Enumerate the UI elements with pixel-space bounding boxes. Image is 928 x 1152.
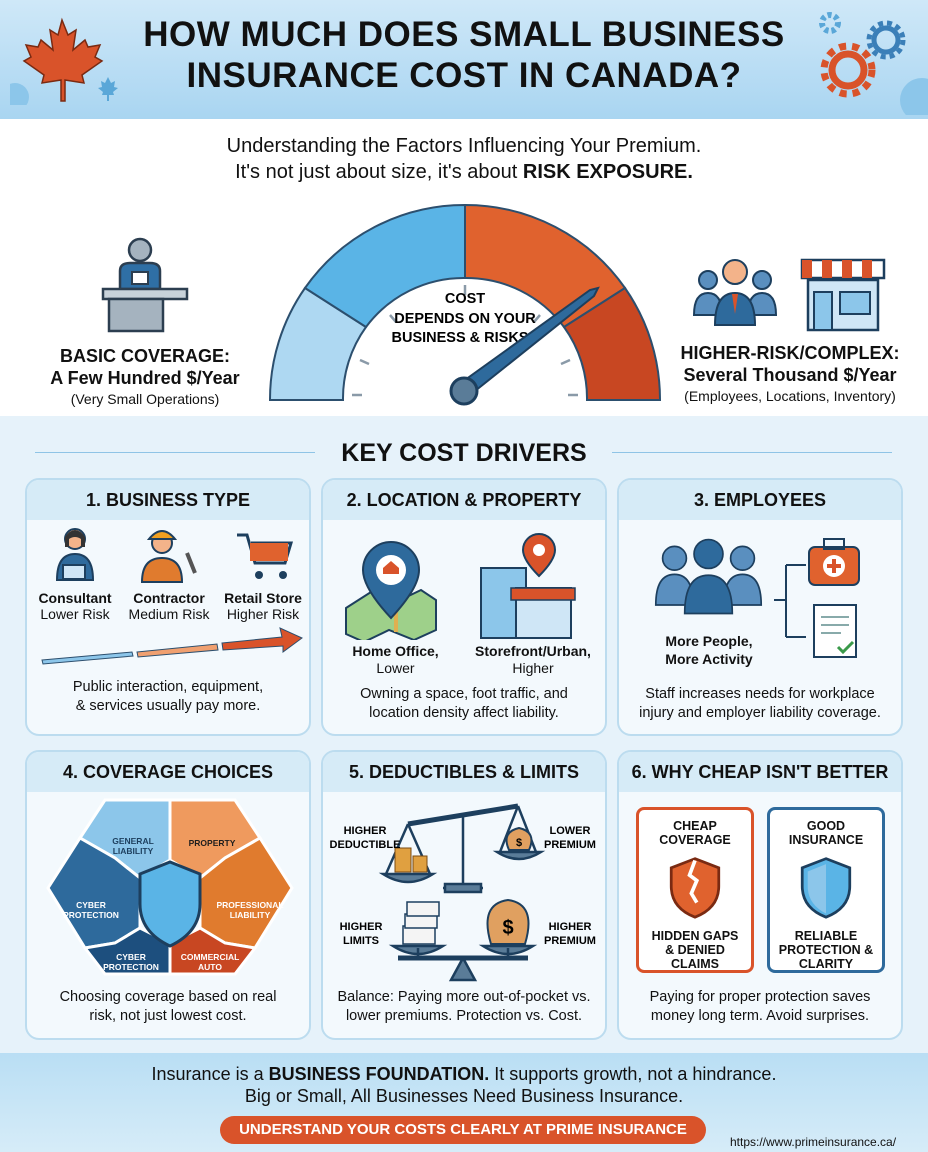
footer: [0, 1053, 928, 1152]
title: [143, 15, 785, 95]
footer message: [152, 1064, 776, 1106]
panel: coverage choices: [25, 750, 311, 1040]
chart: coverage hexagon: LIABILITY: [230, 910, 271, 920]
icon: scales: $: [502, 917, 514, 939]
panel: business type: [25, 478, 311, 736]
panel: location & property: Home Office,: [352, 643, 439, 659]
panel: business type: 1. BUSINESS TYPE: [86, 490, 250, 510]
right: higher risk: [680, 258, 900, 404]
panel: business type: Retail Store: [224, 590, 302, 606]
chart: coverage hexagon: PROPERTY: [189, 838, 236, 848]
card: cheap coverage: [636, 807, 754, 973]
icon: scales: $: [516, 837, 522, 849]
icon: team and storefront: [693, 258, 886, 332]
card: good insurance: GOOD: [807, 819, 845, 833]
chart: coverage hexagon: CYBER: [76, 900, 106, 910]
title: HOW MUCH DOES SMALL BUSINESS: [143, 15, 785, 54]
panel: location & property: Storefront/Urban,: [475, 643, 591, 659]
button: call to action: UNDERSTAND YOUR COSTS CLEARLY AT PRIME INSURANCE: [239, 1121, 687, 1138]
icon: scales: DEDUCTIBLE: [330, 839, 400, 851]
panel: business type: Contractor: [133, 590, 205, 606]
icon: desk worker: [102, 238, 188, 332]
gauge: DEPENDS ON YOUR: [394, 311, 536, 327]
panel: location & property: Higher: [512, 660, 554, 676]
gauge: BUSINESS & RISKS: [392, 330, 529, 346]
card: cheap coverage: CLAIMS: [671, 957, 719, 971]
panel: why cheap isn't better: money long term. Avoid surprises.: [651, 1008, 869, 1024]
panel: coverage choices: Choosing coverage based on real: [60, 989, 276, 1005]
icon: group and forms: [654, 538, 860, 658]
icon: scales: HIGHER: [549, 921, 591, 933]
card: good insurance: INSURANCE RELIABLE: [789, 833, 863, 943]
panel: employees: 3. EMPLOYEES: [694, 490, 826, 510]
panel: business type: Medium Risk: [129, 606, 209, 622]
panel: location & property: 2. LOCATION & PROPERTY: [347, 490, 581, 510]
card: good insurance: [767, 807, 885, 973]
subtitle: Understanding the Factors Influencing Your Premium.: [227, 135, 701, 157]
panel: business type: & services usually pay more.: [76, 698, 260, 714]
panel: why cheap isn't better: Paying for proper protection saves: [650, 989, 870, 1005]
panel: deductibles & limits: 5. DEDUCTIBLES & LIMITS: [349, 762, 579, 782]
chart: coverage hexagon: LIABILITY: [113, 846, 154, 856]
gauge: COST: [445, 291, 485, 307]
panel: deductibles & limits: [321, 750, 607, 1040]
left: basic coverage: A Few Hundred $/Year: [50, 368, 240, 388]
panel: employees: Staff increases needs for workplace: [645, 686, 875, 702]
url: https://www.primeinsurance.ca/: [730, 1135, 896, 1149]
panel: business type: Public interaction, equipment,: [73, 679, 263, 695]
right: higher risk: HIGHER-RISK/COMPLEX:: [680, 343, 900, 363]
subtitle: It's not just about size, it's about RISK EXPOSURE.: [235, 161, 693, 183]
title: INSURANCE COST IN CANADA?: [186, 56, 742, 95]
chart: coverage hexagon: PROTECTION: [103, 962, 159, 972]
card: good insurance: CLARITY: [799, 957, 853, 971]
button: call to action: [220, 1116, 706, 1144]
left: basic coverage: (Very Small Operations): [71, 391, 219, 407]
icon: scales: LOWER: [550, 825, 591, 837]
panel: why cheap isn't better: 6. WHY CHEAP ISN'T BETTER: [632, 762, 888, 782]
icon: scales: HIGHER: [344, 825, 386, 837]
panel: location & property: [321, 478, 607, 736]
card: cheap coverage: & DENIED: [665, 943, 725, 957]
panel: coverage choices: 4. COVERAGE CHOICES: [63, 762, 273, 782]
chart: coverage hexagon: CYBER: [116, 952, 146, 962]
subtitle: [0, 133, 928, 416]
section heading: key cost drivers: KEY COST DRIVERS: [341, 439, 587, 467]
icon: scales: HIGHER: [340, 921, 382, 933]
card: cheap coverage: CHEAP: [673, 819, 717, 833]
icon: scales: PREMIUM: [544, 839, 596, 851]
icon: scales: PREMIUM: [544, 935, 596, 947]
chart: coverage hexagon: AUTO: [198, 962, 222, 972]
chart: coverage hexagon: PROFESSIONAL: [216, 900, 284, 910]
panel: employees: More People,: [665, 633, 753, 649]
arrow: rising risk: [41, 627, 303, 664]
panel: why cheap isn't better: [617, 750, 903, 1040]
labels: [38, 590, 112, 622]
panel: business type: Higher Risk: [227, 606, 299, 622]
card: cheap coverage: COVERAGE HIDDEN GAPS: [652, 833, 738, 943]
header banner: [0, 0, 928, 119]
panel: location & property: location density affect liability.: [369, 705, 559, 721]
icon: map pin and buildings: [345, 533, 576, 640]
labels: Consultant: [38, 590, 112, 606]
left: basic coverage: BASIC COVERAGE:: [60, 346, 230, 366]
right: higher risk: Several Thousand $/Year: [683, 365, 897, 385]
chart: coverage hexagon: [46, 798, 294, 976]
left: basic coverage: [50, 238, 240, 407]
card: good insurance: PROTECTION &: [779, 943, 873, 957]
right: higher risk: (Employees, Locations, Inventory): [684, 388, 896, 404]
panel: coverage choices: risk, not just lowest cost.: [89, 1008, 247, 1024]
gauge: [269, 204, 661, 406]
icons: consultant contractor retail: [56, 528, 293, 583]
panel: location & property: Owning a space, foot traffic, and: [360, 686, 568, 702]
chart: coverage hexagon: GENERAL: [112, 836, 154, 846]
icon: gears: [819, 12, 928, 115]
footer message: Insurance is a BUSINESS FOUNDATION. It supports growth, not a hindrance.: [152, 1064, 776, 1084]
panel: deductibles & limits: lower premiums. Protection vs. Cost.: [346, 1008, 582, 1024]
chart: coverage hexagon: COMMERCIAL: [181, 952, 239, 962]
panel: deductibles & limits: Balance: Paying more out-of-pocket vs.: [337, 989, 591, 1005]
footer message: Big or Small, All Businesses Need Business Insurance.: [245, 1086, 683, 1106]
panel: employees: injury and employer liability coverage.: [639, 705, 881, 721]
labels: Lower Risk: [40, 606, 110, 622]
panel: location & property: Lower: [376, 660, 415, 676]
icon: maple leaf: [10, 18, 118, 105]
chart: coverage hexagon: PROTECTION: [63, 910, 119, 920]
icon: scales: LIMITS: [343, 935, 379, 947]
panel: employees: [617, 478, 903, 736]
panel: employees: More Activity: [665, 651, 753, 667]
icon: scales: [330, 804, 596, 982]
